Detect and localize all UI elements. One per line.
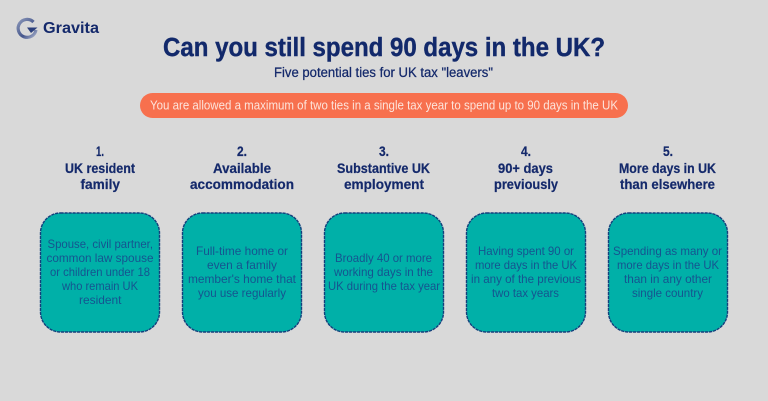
card box <box>608 213 728 332</box>
heading: tie 5: than elsewhere <box>620 177 715 192</box>
icon: G mark <box>18 19 38 37</box>
card text: common law spouse <box>46 251 154 265</box>
card: tie 1 <box>40 213 160 332</box>
card box <box>466 213 586 332</box>
card: tie 3 <box>324 213 444 332</box>
card text: or children under 18 <box>50 265 150 279</box>
heading: tie 3 <box>337 144 430 192</box>
panel: tie 1 <box>40 144 160 332</box>
card text <box>46 237 154 307</box>
title: Can you still spend 90 days in the UK? <box>163 34 605 62</box>
card: tie 5 <box>608 213 728 332</box>
card text: you use regularly <box>198 286 286 300</box>
card text: member's home that <box>188 272 297 286</box>
heading: tie 5: 5. <box>663 144 673 159</box>
heading: tie 4 <box>494 144 558 192</box>
card box <box>182 213 302 332</box>
heading: tie 1: family <box>80 177 120 192</box>
card text: more days in the UK <box>617 258 719 272</box>
heading: tie 4: previously <box>494 177 558 192</box>
heading: tie 1: 1. <box>96 144 104 159</box>
card text: single country <box>632 286 703 300</box>
heading: tie 1: UK resident <box>65 161 135 176</box>
panel: tie 3 <box>324 144 444 332</box>
card: tie 4 <box>466 213 586 332</box>
card text: in any of the previous <box>471 272 581 286</box>
card text <box>613 244 722 300</box>
card text: even a family <box>207 258 277 272</box>
heading: tie 5: More days in UK <box>619 161 716 176</box>
card text <box>188 244 297 300</box>
heading: tie 3: employment <box>344 177 424 192</box>
callout: two ties maximum <box>140 93 628 118</box>
card text: Broadly 40 or more <box>335 251 432 265</box>
logo wordmark: Gravita <box>43 20 99 37</box>
card text: who remain UK <box>61 279 138 293</box>
card text: Spending as many or <box>613 244 722 258</box>
card text: two tax years <box>492 286 559 300</box>
card text: Having spent 90 or <box>478 244 574 258</box>
card box <box>324 213 444 332</box>
card text <box>471 244 581 300</box>
callout text: You are allowed a maximum of two ties in a single tax year to spend up to 90 days in the UK <box>150 98 619 112</box>
panel: tie 2 <box>182 144 302 332</box>
heading: tie 4: 4. <box>521 144 531 159</box>
panel: tie 4 <box>466 144 586 332</box>
card text: working days in the <box>333 265 433 279</box>
card text: UK during the tax year <box>328 279 440 293</box>
panel: tie 5 <box>608 144 728 332</box>
card box <box>40 213 160 332</box>
card text: Spouse, civil partner, <box>48 237 153 251</box>
card text: more days in the UK <box>475 258 577 272</box>
card text <box>328 251 440 293</box>
heading: tie 1 <box>65 144 135 192</box>
heading: tie 3: 3. <box>379 144 389 159</box>
card text: resident <box>79 293 122 307</box>
heading: tie 5 <box>619 144 716 192</box>
callout pill <box>140 93 628 118</box>
heading: tie 2: 2. <box>237 144 247 159</box>
heading: tie 4: 90+ days <box>498 161 553 176</box>
heading: tie 2 <box>190 144 294 192</box>
heading: tie 2: Available <box>213 161 271 176</box>
card: tie 2 <box>182 213 302 332</box>
card text: Full-time home or <box>196 244 288 258</box>
heading: tie 2: accommodation <box>190 177 294 192</box>
logo: Gravita <box>18 19 99 37</box>
subtitle: Five potential ties for UK tax "leavers" <box>274 65 493 80</box>
card text: than in any other <box>624 272 712 286</box>
heading: tie 3: Substantive UK <box>337 161 430 176</box>
